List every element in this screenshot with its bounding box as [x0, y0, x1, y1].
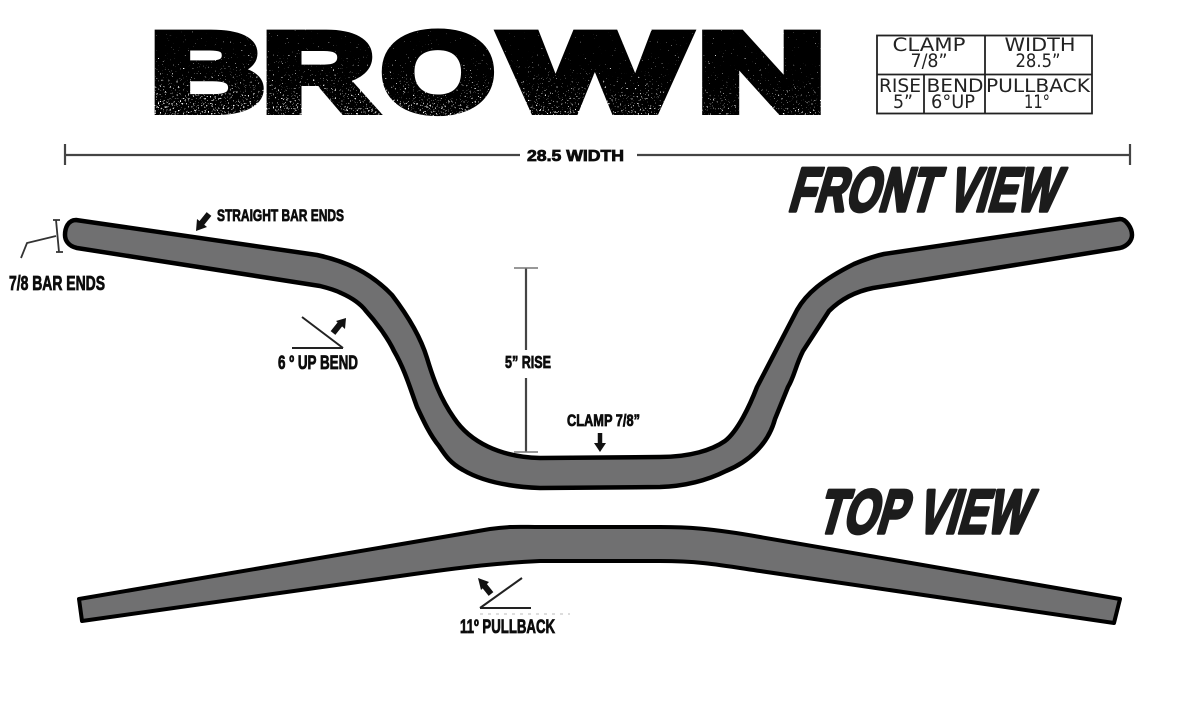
width dimension line	[65, 144, 1130, 165]
spec table: PULLBACK	[986, 75, 1091, 97]
heading: front view: FRONT VIEW	[783, 156, 1071, 225]
spec table: 7/8”	[910, 50, 948, 72]
width dimension line: 28.5 WIDTH	[527, 148, 624, 165]
callout: clamp 7/8	[567, 411, 640, 452]
spec table: 28.5”	[1016, 50, 1060, 72]
callout: 11 degree pullback	[460, 578, 570, 638]
brand title: BROWN: R	[262, 10, 374, 134]
heading: top view: TOP VIEW	[812, 478, 1042, 547]
callout: 6 degree up bend	[278, 317, 358, 374]
brand title: BROWN: W	[504, 10, 687, 134]
spec table: CLAMP	[892, 34, 966, 56]
callout: 7/8 bar ends: 7/8 BAR ENDS	[9, 273, 105, 295]
spec table	[877, 34, 1092, 114]
brand title: BROWN: O	[382, 10, 494, 134]
callout: 6 degree up bend: 6 º UP BEND	[278, 353, 358, 374]
top view handlebar	[79, 527, 1120, 623]
front view handlebar	[65, 219, 1132, 488]
callout: 7/8 bar ends	[9, 220, 105, 295]
spec table: RISE	[879, 75, 921, 97]
dimension: 5 inch rise: 5” RISE	[505, 352, 551, 372]
brand title: BROWN	[150, 10, 830, 134]
brand title: BROWN: N	[698, 10, 826, 134]
callout: clamp 7/8: CLAMP 7/8”	[567, 411, 640, 430]
brand title: BROWN: B	[150, 10, 264, 134]
spec table: 11°	[1024, 91, 1050, 113]
spec table: 6°UP	[931, 91, 975, 113]
spec table: WIDTH	[1004, 34, 1076, 56]
callout: straight bar ends	[196, 206, 344, 231]
callout: straight bar ends: STRAIGHT BAR ENDS	[217, 206, 344, 225]
spec table: 5”	[893, 91, 913, 113]
callout: 11 degree pullback: 11º PULLBACK	[460, 617, 555, 638]
spec table: BEND	[926, 75, 984, 97]
dimension: 5 inch rise	[505, 268, 551, 452]
